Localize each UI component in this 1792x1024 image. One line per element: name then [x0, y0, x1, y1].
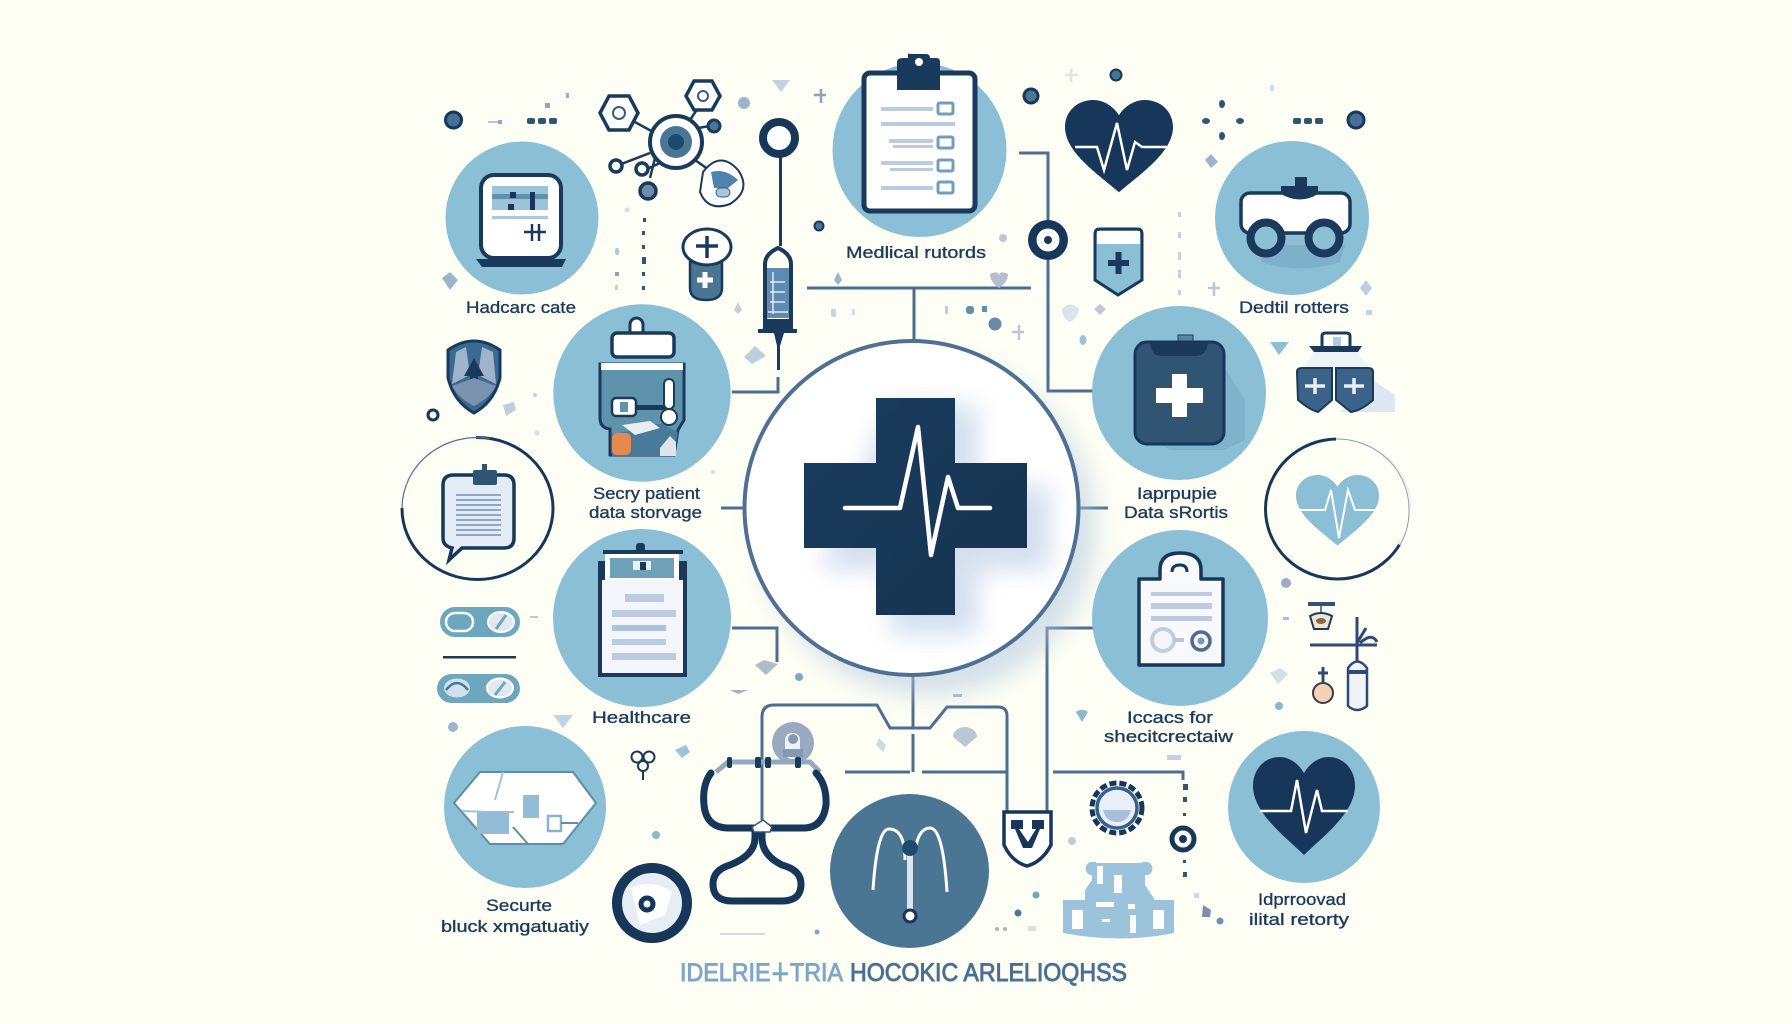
label: ilital retorty	[1249, 910, 1350, 929]
icon: small flower	[632, 752, 654, 780]
label: Data sRortis	[1124, 503, 1228, 522]
label: Secry patient	[593, 484, 700, 503]
label	[441, 896, 590, 936]
icon: small shield with cross	[1095, 229, 1142, 295]
panel: secure patient data storage	[553, 304, 731, 522]
icon: double shields	[1297, 333, 1395, 412]
label: Hadcarc cate	[466, 298, 576, 317]
label: Medlical rutords	[846, 243, 986, 262]
icon: shield left	[448, 341, 500, 413]
label	[1124, 484, 1228, 522]
icon: laptop	[476, 175, 566, 267]
icon: target node lower	[1172, 828, 1194, 850]
panel: outlined clipboard circle	[402, 438, 553, 580]
icon: pill toggles	[437, 607, 520, 703]
icon: light heart	[1296, 475, 1379, 546]
panel: outlined heart circle	[1266, 439, 1410, 579]
panel: icons for shortcuts	[1092, 530, 1268, 746]
icon: bottom shield	[1004, 812, 1051, 866]
icon: medical bag	[1135, 335, 1245, 450]
icon: lab equipment	[1308, 602, 1377, 710]
title	[680, 959, 1127, 987]
icon: document	[598, 543, 687, 677]
icon: syringe	[758, 122, 797, 370]
panel: secure block	[441, 726, 606, 936]
icon: capsule with cross	[683, 229, 731, 300]
icon: storage device	[600, 318, 684, 456]
label: shecitcrectaiw	[1104, 727, 1234, 746]
icon: gear lens	[1092, 783, 1142, 833]
panel: dedtil rotters	[1215, 141, 1369, 317]
icon: medical cross	[804, 398, 1027, 615]
label: Securte	[486, 896, 552, 915]
icon: clipboard	[864, 53, 975, 211]
plus signs	[814, 69, 1220, 340]
title: IDELRIE∔TRIA	[680, 959, 843, 987]
label: data storvage	[589, 503, 702, 522]
icon: molecule network	[600, 81, 743, 206]
panel: improved vital reports	[1228, 731, 1380, 929]
icon: hexagon map	[454, 772, 596, 844]
icon: note bubble	[443, 464, 514, 560]
title: HOCOKIC ARLELIOQHSS	[850, 959, 1127, 987]
decorative dots	[428, 69, 1372, 935]
icon: vehicle	[1241, 177, 1350, 254]
icon: stethoscope	[704, 722, 826, 901]
label: Idprroovad	[1258, 890, 1346, 909]
pulse line	[845, 427, 990, 555]
icon: target node	[1028, 220, 1068, 260]
icon: heart with pulse top	[1065, 100, 1173, 192]
panel: data shorts	[1092, 306, 1266, 522]
label: bluck xmgatuatiy	[441, 917, 590, 936]
panel: medical records	[832, 53, 1006, 262]
label: Healthcare	[592, 708, 691, 727]
label	[589, 484, 702, 522]
connector lines	[721, 153, 1183, 820]
label: Iaprpupie	[1137, 484, 1217, 503]
panel: hadcarc cate	[446, 142, 598, 317]
label	[1249, 890, 1350, 929]
panel: bottom stethoscope circle	[830, 794, 989, 948]
panel: healthcare	[553, 529, 731, 727]
icon: heart with pulse	[1253, 757, 1355, 855]
label: Dedtil rotters	[1239, 298, 1349, 317]
icon: hospital building	[1063, 862, 1174, 938]
label: Iccacs for	[1127, 708, 1213, 727]
panel: central cross	[744, 341, 1096, 696]
icon: tag document	[1139, 553, 1223, 665]
label	[1104, 708, 1234, 746]
icon: disc	[617, 868, 687, 938]
